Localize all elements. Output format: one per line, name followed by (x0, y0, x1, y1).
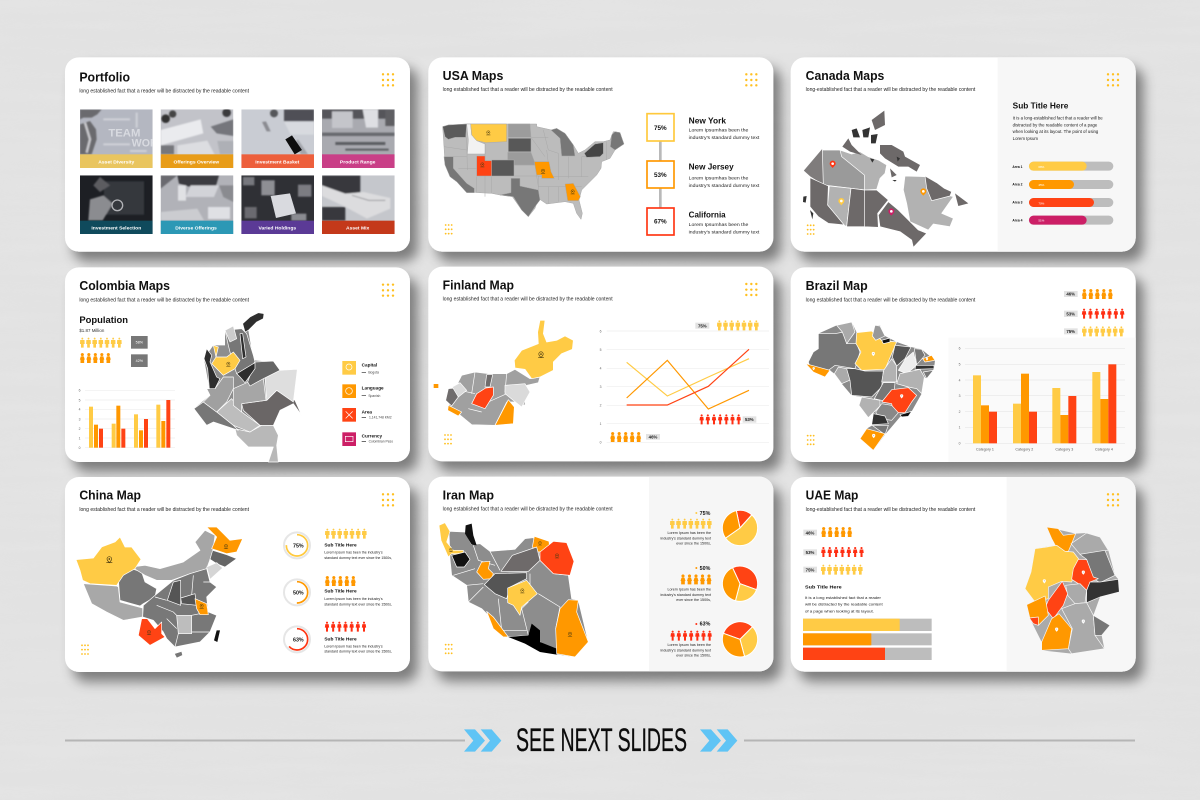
stat: California: industry's standard dummy text (689, 229, 760, 234)
donut 50: 50% (293, 590, 304, 596)
subtitle: long established fact that a reader will be distracted by the readable content (79, 89, 250, 95)
icon: map pins (1043, 571, 1085, 632)
subtitle block: Sub Title Here (1013, 101, 1069, 111)
icon: map pins (812, 352, 928, 438)
legend: Language (342, 384, 384, 398)
stat block 63: Lorem Ipsum has been the (667, 643, 711, 647)
stat block 3: Sub Title Here (324, 636, 357, 642)
stat: California (647, 208, 760, 235)
legend: Area: Area (362, 409, 372, 414)
panel: Canada maps (791, 57, 1136, 252)
bar chart: 5 (959, 363, 961, 367)
stat block 2 (324, 576, 392, 606)
population heading: $1.87 Million (79, 328, 105, 333)
pie chart 1 (722, 510, 758, 546)
bar: Area 2: 45% (1038, 183, 1045, 187)
title: Colombia Maps (79, 278, 170, 293)
tile: Asset Diversity: WOR (132, 138, 158, 150)
stat block 75: ever since the 1500s, (676, 541, 711, 545)
donut 75: 75% (293, 543, 304, 549)
title: Finland Map (443, 277, 514, 292)
small dots (81, 644, 89, 655)
stat block 50 (661, 566, 711, 602)
tile: Product Range (322, 109, 395, 168)
stat block 1: Lorem Ipsum has been the industry's (324, 551, 383, 555)
bar chart: 5 (79, 398, 81, 402)
small dots (807, 435, 815, 445)
title: UAE Map (806, 488, 858, 503)
legend: Currency (342, 432, 393, 446)
subtitle block: Lorem Ipsum (1013, 136, 1038, 141)
subtitle: long established fact that a reader will be distracted by the readable content (443, 87, 613, 93)
badge 75 (695, 323, 709, 329)
badge 46: 46% (649, 435, 657, 440)
tile: Diverse Offerings: Diverse Offerings (175, 225, 217, 231)
stat block 63: industry's standard dummy text (661, 648, 711, 652)
subtitle: long established fact that a reader will be distracted by the readable content (443, 506, 613, 512)
badge 75: 75% (698, 323, 707, 328)
bar: Area 2 (1012, 180, 1113, 189)
stat block 50: 50% (700, 566, 711, 572)
tile: Asset Mix (322, 175, 395, 234)
bar chart: 0 (959, 442, 961, 446)
stat block 50: industry's standard dummy text (661, 593, 711, 597)
panel: UAE map (791, 477, 1136, 672)
stat block 1: standard dummy text ever since the 1500s, (324, 556, 392, 560)
bar chart: Category 3 (1055, 447, 1073, 451)
stat block 63 (661, 622, 712, 657)
line chart: 2 (600, 404, 602, 408)
arrow: left chevrons (464, 729, 501, 752)
stat: New York: industry's standard dummy text (689, 135, 760, 140)
stat: New Jersey (647, 161, 760, 188)
stat block 2: Lorem Ipsum has been the industry's (324, 597, 383, 601)
legend: Currency: Colombian Peso (369, 440, 393, 444)
stat block 75: industry's standard dummy text (661, 536, 711, 540)
bar chart: 4 (959, 378, 961, 382)
stat: New Jersey: New Jersey (689, 161, 734, 171)
stat block 3 (324, 622, 392, 654)
text block (805, 585, 884, 614)
people stat 53: 53% (806, 550, 814, 555)
badge 53 (743, 416, 756, 423)
bar chart: 6 (959, 347, 961, 351)
small dots (445, 644, 453, 654)
bar chart: Category 1 (976, 447, 994, 451)
legend: Currency: Currency (362, 433, 383, 438)
side panel (649, 477, 773, 671)
side panel (998, 57, 1136, 252)
dots decoration (382, 283, 394, 297)
people row orange (80, 353, 111, 363)
people stat 46 (803, 527, 852, 537)
people row yellow (717, 320, 759, 330)
map: Canada (803, 111, 968, 247)
badge 42 (131, 354, 148, 367)
map: Germany (1025, 527, 1119, 654)
small dots (807, 224, 815, 235)
stat: New York: Lorem Ipsumhas been the (689, 128, 749, 133)
people stat 75: 75% (806, 567, 814, 572)
map: China (76, 527, 243, 658)
bar chart: 1 (79, 436, 81, 440)
title: Brazil Map (806, 278, 868, 293)
panel: China map (65, 477, 410, 672)
bar: Area 4: 51% (1038, 219, 1045, 223)
bar: Area 2: Area 2 (1012, 183, 1023, 187)
panel: Iran map (428, 477, 773, 671)
icon: map pins (449, 541, 572, 636)
bar: Area 3 (1012, 198, 1113, 207)
bar chart: 1 (959, 426, 961, 430)
legend: Capital (342, 361, 379, 375)
dots decoration (1107, 73, 1119, 87)
people stat 75 (1064, 326, 1124, 336)
tile: Investment Basket: Investment Basket (255, 159, 300, 165)
tile: Offerings Overview (160, 109, 234, 168)
title: Iran Map (443, 487, 494, 502)
chart backdrop (948, 338, 1136, 462)
line chart: 5 (600, 348, 602, 352)
tile: Asset Diversity (80, 109, 158, 168)
donut 63 (284, 626, 310, 652)
legend: Area: 1,141,748 KM2 (369, 416, 392, 420)
footer rule left (65, 740, 465, 742)
people stat 53: 53% (1066, 311, 1075, 316)
panel: Brazil map (791, 267, 1136, 462)
tile: Investment Selection (80, 175, 153, 234)
badge 42: 42% (136, 359, 144, 363)
subtitle: long-established fact that a reader will be distracted by the readable content (806, 87, 976, 93)
line chart: 4 (600, 367, 602, 371)
title: China Map (79, 488, 141, 503)
map: Colombia (194, 313, 302, 462)
subtitle block: It is a long-established fact that a reader will be (1013, 115, 1103, 120)
bar: Area 1 (1012, 162, 1113, 171)
people stat 46: 46% (806, 530, 814, 535)
stat: New York (647, 114, 760, 141)
pie chart 3 (722, 622, 758, 657)
bar: Area 3: 70% (1038, 201, 1045, 205)
people row red (699, 414, 741, 424)
badge 58: 58% (136, 341, 144, 345)
text block: Sub Title Here (805, 585, 842, 591)
bar chart: 0 (79, 446, 81, 450)
legend: Language: Language (362, 386, 384, 391)
donut 75 (284, 532, 310, 558)
line chart (600, 329, 769, 445)
line chart: 6 (600, 329, 602, 333)
stat block 2: Sub Title Here (324, 589, 357, 595)
tile: Varied Holdings (241, 175, 314, 234)
subtitle block (1013, 101, 1103, 141)
stat block 75: 75% (700, 511, 711, 517)
text block: of a page when looking at its layout. (805, 609, 874, 614)
dots decoration (1107, 493, 1119, 507)
bar chart: Category 4 (1095, 447, 1113, 451)
population heading: Population (79, 315, 128, 325)
subtitle: long established fact that a reader will be distracted by the readable content (79, 297, 250, 303)
tile: Investment Basket (241, 109, 314, 168)
stat block 3: Lorem Ipsum has been the industry's (324, 644, 383, 648)
title: Canada Maps (806, 68, 884, 83)
stat: New Jersey: 53% (654, 172, 667, 179)
stat block 50: Lorem Ipsum has been the (667, 588, 711, 592)
map: Finland (434, 320, 573, 425)
icon: map pins (830, 161, 926, 216)
stat block 2: standard dummy text ever since the 1500s, (324, 602, 392, 606)
arrow: right chevrons (700, 729, 737, 752)
bar: Area 4 (1012, 216, 1113, 225)
badge 53: 53% (745, 417, 754, 422)
tile: Offerings Overview: Offerings Overview (173, 159, 219, 165)
stat block 50: ever since the 1500s, (676, 598, 711, 602)
subtitle block: when looking at its layout. The point of using (1013, 129, 1099, 134)
people row orange (610, 432, 641, 442)
people stat 53 (803, 547, 864, 557)
stat: New Jersey: Lorem Ipsumhas been the (689, 176, 749, 181)
tile: Varied Holdings: Varied Holdings (258, 225, 296, 231)
map: Iran (439, 523, 588, 657)
panel: USA maps (428, 57, 773, 252)
people stat 75 (803, 565, 863, 575)
tile: Asset Diversity: TEAM (108, 128, 140, 140)
dots decoration (382, 73, 394, 87)
side panel (1007, 477, 1136, 672)
map: USA (443, 124, 624, 219)
people stat 75: 75% (1066, 329, 1075, 334)
bar chart: 6 (79, 389, 81, 393)
connector line (656, 141, 664, 208)
panel: portfolio (65, 57, 410, 252)
bar chart: 4 (79, 408, 81, 412)
stat block 63: ever since the 1500s, (676, 653, 711, 657)
bar: Area 3: Area 3 (1012, 201, 1023, 205)
bar chart: 3 (959, 394, 961, 398)
line chart: 0 (600, 441, 602, 445)
dots decoration (745, 73, 758, 87)
stat block 1 (324, 529, 392, 560)
badge 46 (646, 434, 660, 440)
stat block 75: Lorem Ipsum has been the (667, 531, 711, 535)
bar chart: 3 (79, 417, 81, 421)
footer rule right (744, 740, 1135, 742)
stat: California: California (689, 209, 726, 219)
icon: map pins (106, 544, 228, 635)
subtitle: long established fact that a reader will be distracted by the readable content (806, 297, 976, 303)
map: Brazil (806, 322, 935, 450)
subtitle: long established fact that a reader will be distracted by the readable content (443, 297, 613, 303)
icon: map pins (480, 131, 575, 194)
small dots (445, 224, 453, 235)
legend: Capital: Bogotá (368, 371, 379, 375)
donut 50 (284, 579, 310, 605)
title: Portfolio (79, 70, 130, 85)
stat block 3: standard dummy text ever since the 1500s, (324, 650, 392, 654)
icon: map pin (226, 362, 230, 366)
legend: Capital: Capital (362, 363, 377, 368)
panel: Colombia maps (65, 267, 410, 462)
stat: New York: 75% (654, 125, 667, 132)
stat block 75 (661, 511, 712, 545)
tile: Investment Selection: Investment Selection (91, 225, 141, 231)
subtitle block: distracted by the readable content of a page (1013, 122, 1098, 127)
bar chart (79, 389, 175, 450)
people row yellow (80, 338, 122, 348)
tile: Diverse Offerings (160, 175, 234, 234)
subtitle: long established fact that a reader will be distracted by the readable content (79, 507, 250, 513)
stat: California: Lorem Ipsumhas been the (689, 222, 749, 227)
footer text: SEE NEXT SLIDES (516, 722, 687, 758)
tile: Asset Diversity: Asset Diversity (98, 159, 135, 165)
small dots (444, 434, 452, 445)
line chart: 1 (600, 422, 602, 426)
bar chart: 2 (79, 427, 81, 431)
population heading (79, 315, 128, 333)
legend: Area (342, 408, 392, 422)
people stat 46 (1064, 289, 1113, 299)
badge 58 (131, 336, 148, 349)
donut 63: 63% (293, 637, 304, 643)
pie chart 2 (722, 566, 758, 601)
legend: Language: Spanish (368, 394, 381, 398)
bar chart (959, 347, 1125, 451)
title: USA Maps (443, 68, 503, 83)
stat: New York: New York (689, 115, 726, 125)
people stat 53 (1064, 309, 1124, 319)
bar: Area 1: 68% (1038, 165, 1045, 169)
dots decoration (382, 493, 394, 507)
bar chart: 2 (959, 410, 961, 414)
tile: Product Range: Product Range (340, 159, 376, 165)
bar: Area 4: Area 4 (1012, 219, 1023, 223)
stat: California: 67% (654, 219, 667, 226)
line chart: 3 (600, 385, 602, 389)
text block: It is a long established fact that a reader (805, 595, 882, 600)
stat block 1: Sub Title Here (324, 543, 357, 549)
tile: Asset Mix: Asset Mix (346, 226, 370, 232)
stat: New Jersey: industry's standard dummy text (689, 183, 760, 188)
dots decoration (745, 283, 758, 296)
people stat 46: 46% (1066, 292, 1075, 297)
subtitle: long-established fact that a reader will be distracted by the readable content (806, 507, 976, 513)
stat block 63: 63% (700, 622, 711, 628)
bar chart: Category 2 (1015, 447, 1033, 451)
bar: Area 1: Area 1 (1012, 165, 1023, 169)
text block: will be distracted by the readable content (805, 602, 884, 607)
progress bars (803, 619, 932, 660)
icon: map pin (538, 352, 544, 358)
panel: Finland map (428, 267, 773, 461)
